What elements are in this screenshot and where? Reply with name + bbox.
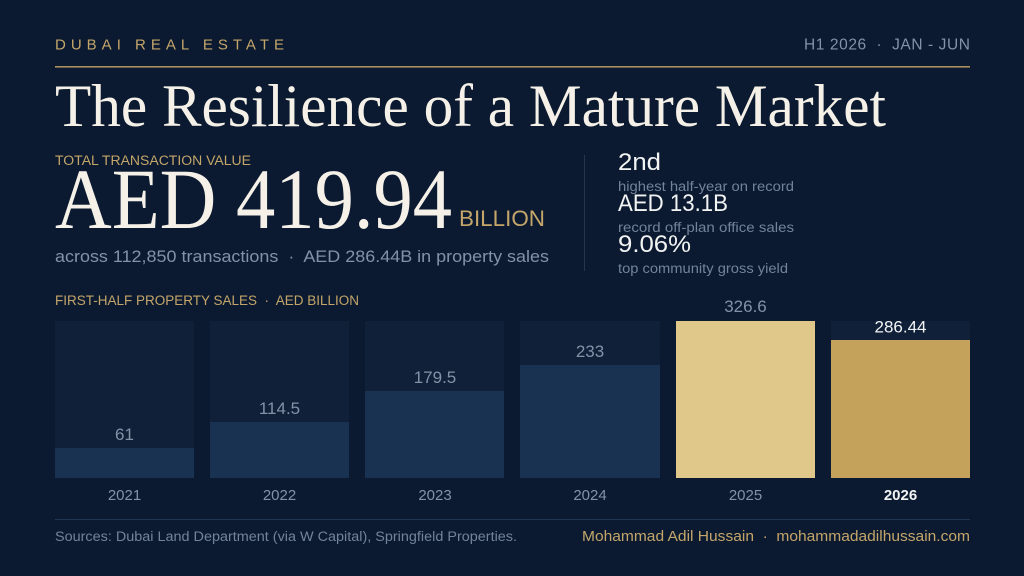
bar 2023: 179.5: [414, 368, 456, 387]
bar 2026: 286.44: [874, 318, 926, 336]
panel: key stats: [584, 149, 794, 276]
bar 2025: 326.6: [724, 297, 767, 316]
bar 2025: [676, 297, 815, 504]
footer: [55, 519, 970, 545]
metric label: TOTAL TRANSACTION VALUE: [55, 153, 251, 168]
stat: 2nd: [618, 149, 794, 194]
unit: BILLION: [459, 206, 545, 231]
bar 2024: [520, 321, 660, 504]
bar 2021: 61: [115, 425, 134, 444]
kicker: DUBAI REAL ESTATE: [55, 36, 284, 54]
bar 2026: 2026: [884, 487, 917, 504]
big number: AED 419.94: [55, 151, 452, 247]
panel: total transaction value: [55, 151, 549, 266]
bar 2021: [55, 321, 194, 504]
stat: AED 13.1B: AED 13.1B: [618, 190, 728, 217]
bar 2023: [365, 321, 504, 504]
attribution: Mohammad Adil Hussain · mohammadadilhussain.com: [582, 529, 970, 545]
bar chart: [55, 297, 970, 504]
bar 2024: 233: [576, 342, 604, 361]
bar 2023: 2023: [418, 487, 452, 504]
bar 2021: 2021: [108, 487, 141, 504]
bar 2024: 2024: [573, 487, 607, 504]
stat: 9.06%: top community gross yield: [618, 261, 788, 276]
stat: 2nd: highest half-year on record: [618, 179, 794, 194]
bar 2026: [831, 318, 970, 504]
header: [55, 36, 970, 68]
stat: 9.06%: 9.06%: [618, 231, 691, 258]
stat: AED 13.1B: record off-plan office sales: [618, 220, 794, 235]
stat: AED 13.1B: [618, 190, 794, 235]
bar 2022: 114.5: [259, 399, 300, 418]
bar 2022: [210, 321, 349, 504]
bar 2022: 2022: [263, 487, 296, 504]
bar 2025: 2025: [729, 487, 762, 504]
sources: Sources: Dubai Land Department (via W Capital), Springfield Properties.: [55, 529, 517, 544]
stat: 2nd: 2nd: [618, 149, 661, 176]
supporting text: across 112,850 transactions · AED 286.44B in property sales: [55, 247, 549, 266]
period label: H1 2026 · JAN - JUN: [804, 36, 970, 54]
title: The Resilience of a Mature Market: [55, 73, 886, 139]
stat: 9.06%: [618, 231, 788, 276]
chart heading: FIRST-HALF PROPERTY SALES · AED BILLION: [55, 293, 359, 308]
